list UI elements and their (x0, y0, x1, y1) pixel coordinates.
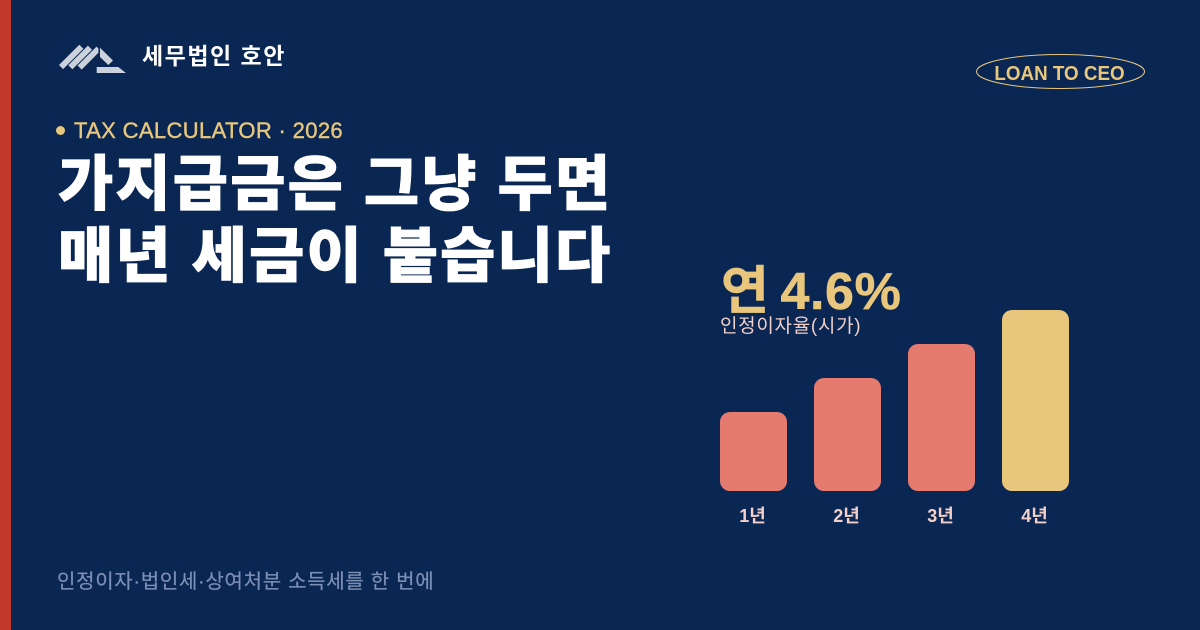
chart panel (720, 263, 1069, 526)
bar 1 (720, 412, 787, 491)
title: 매년 세금이 붙습니다 (58, 223, 612, 290)
icon: roof logo (59, 44, 126, 73)
rate value: 연 4.6% (721, 263, 901, 321)
bar 2 (814, 378, 881, 491)
label 3: 3년 (927, 506, 954, 526)
bar 4 (1002, 310, 1069, 491)
badge: loan to ceo: LOAN TO CEO (994, 63, 1125, 85)
eyebrow (56, 118, 343, 143)
label 2: 2년 (833, 506, 860, 526)
label 4: 4년 (1021, 506, 1048, 526)
logo group (59, 43, 286, 73)
eyebrow dot (56, 126, 65, 135)
eyebrow text: TAX CALCULATOR · 2026 (74, 118, 343, 143)
badge: loan to ceo (976, 54, 1145, 89)
title: 가지급금은 그냥 두면 (58, 151, 612, 218)
label 1: 1년 (739, 506, 766, 526)
footer text: 인정이자·법인세·상여처분 소득세를 한 번에 (57, 571, 434, 593)
brand name: 세무법인 호안 (142, 43, 286, 69)
rate caption: 인정이자율(시가) (720, 316, 861, 337)
bar 3 (908, 344, 975, 491)
title (58, 151, 612, 290)
accent stripe (0, 0, 11, 630)
